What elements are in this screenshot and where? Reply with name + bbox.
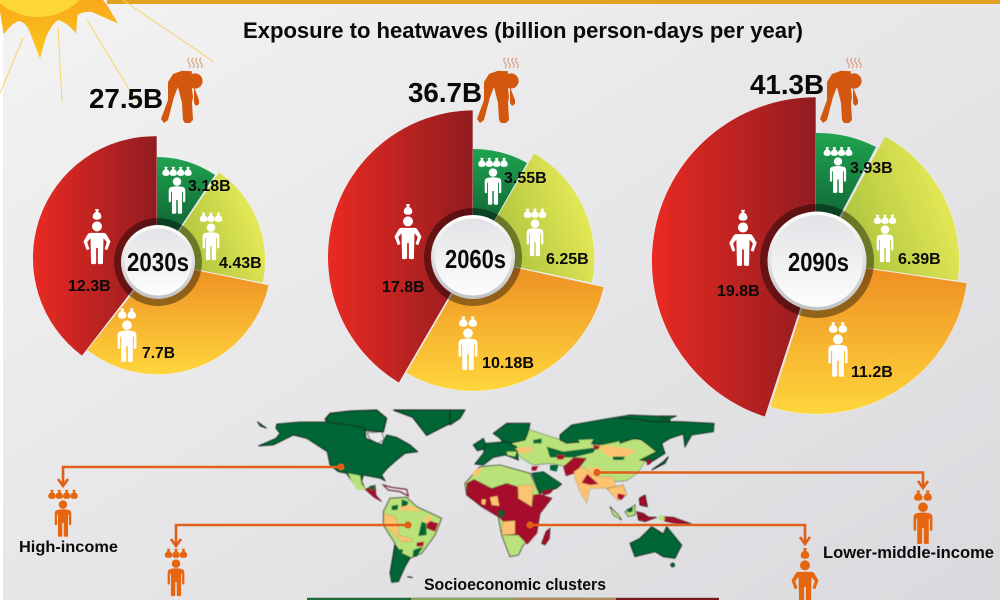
connector: low-income [526,521,810,544]
slice: upper-middle income 2030s [158,172,265,283]
label: high-income: High-income [19,539,118,556]
icon: exhausted person 2060s [477,58,519,123]
panel: 2060s donut [328,58,604,391]
hub disc [121,225,195,299]
panel: 2060s donut: 10.18B [482,355,534,372]
slice: upper-middle income 2060s [473,153,595,283]
icon: high income person [478,158,508,205]
map: Americas [257,410,463,582]
icon: low income person [729,210,757,266]
hub disc [768,212,866,310]
slice: lower-middle income 2060s [406,258,604,391]
total: 36.7B: 36.7B [408,77,482,108]
slice: low income 2090s [652,97,816,417]
panel: 2030s donut: 12.3B [68,278,111,295]
slice: high income 2030s [157,157,215,262]
icon: upper-middle-income person [165,549,187,596]
top band [107,0,1000,4]
value labels: 3.55B [504,170,547,187]
icon: upper-middle income person [200,213,222,260]
icon: exhausted person 2030s [161,58,203,123]
slice: low income 2060s [328,110,473,383]
icon: lower-middle income person [118,308,136,362]
panel: 2060s donut: 6.25B [546,251,589,268]
icon: lower-middle income person [828,322,848,377]
hub ring [760,204,874,318]
connector: lower-middle-income [593,469,928,488]
value labels: 3.18B [188,178,231,195]
value labels: 3.93B [850,160,893,177]
slice: lower-middle income 2090s [770,261,967,414]
icon: high income person [162,167,192,214]
legend heading: Socioeconomic clusters [424,575,606,594]
world map [257,410,714,582]
icon: low income person [84,209,110,264]
panel: 2090s donut: 6.39B [898,251,941,268]
hub ring [424,208,522,306]
icon: upper-middle income person [524,209,546,256]
icon: exhausted person 2090s [820,58,862,123]
icon: lower-middle income person [459,316,477,370]
icon: sun [0,0,214,102]
panel: 2090s donut [652,58,967,417]
icon: upper-middle income person [874,215,896,262]
slice: low income 2030s [33,136,157,356]
panel: 2060s donut: 17.8B [382,279,425,296]
decade label: 2030s [127,247,189,277]
decade label: 2090s [788,247,849,277]
icon: low-income person [792,548,818,600]
slice: upper-middle income 2090s [817,136,959,281]
icon: high income person [824,147,852,193]
panel: 2030s donut: 7.7B [142,345,175,362]
connector: upper-middle-income [171,521,412,546]
panel: 2030s donut: 4.43B [219,255,262,272]
map: Europe, Africa and Asia [450,410,670,557]
hub disc [431,215,515,299]
total: 27.5B: 27.5B [89,83,163,114]
panel: 2030s donut [33,58,269,375]
icon: low income person [394,204,422,259]
total: 41.3B: 41.3B [750,69,824,100]
panel: 2090s donut: 19.8B [717,283,760,300]
connector: high-income [58,463,345,486]
hub ring [114,218,202,306]
panel: 2090s donut: 11.2B [851,364,893,381]
decade label: 2060s [445,244,506,274]
legend bar [307,597,719,600]
map: East Asia and Australia [613,416,714,567]
label: lower-middle-income: Lower-middle-income [823,544,994,562]
title: Exposure to heatwaves (billion person-days per year) [243,18,803,43]
slice: high income 2090s [816,133,876,261]
icon: high-income person [48,490,78,537]
slice: lower-middle income 2030s [87,262,269,375]
icon: lower-middle-income person [914,490,932,544]
slice: high income 2060s [473,149,527,258]
